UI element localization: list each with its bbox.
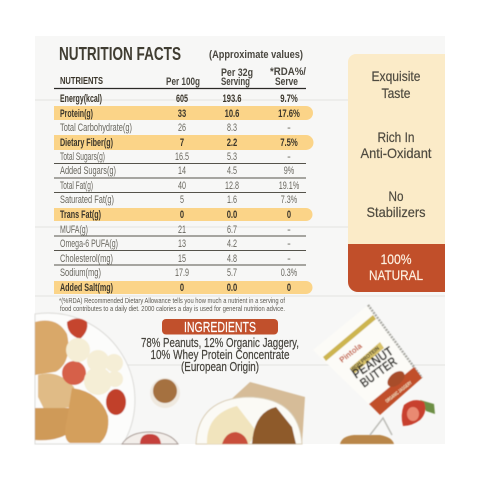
row: added salt: 0 — [287, 282, 291, 294]
row: saturated fat: 7.3% — [281, 194, 297, 206]
row: trans fat: 0.0 — [227, 209, 237, 221]
row: sugars — [60, 151, 291, 163]
column headers: *RDA%/ — [270, 66, 306, 78]
row: fiber: Dietary Fiber(g) — [60, 137, 113, 149]
row: cholesterol: Cholesterol(mg) — [60, 253, 113, 265]
row: saturated fat: 5 — [180, 194, 184, 206]
row: cholesterol: - — [287, 253, 291, 265]
product pouch: peanut butter: ORGANIC JAGGERY — [385, 380, 414, 405]
ingredients text: 10% Whey Protein Concentrate — [150, 348, 290, 362]
benefit: anti-oxidant: Anti-Oxidant — [360, 145, 432, 161]
product pouch: peanut butter: BUTTER — [357, 353, 400, 390]
row: added salt — [60, 282, 291, 294]
row: omega — [60, 238, 291, 250]
badge: 100% natural: NATURAL — [369, 267, 423, 283]
row: protein — [60, 108, 300, 120]
row: energy: 193.6 — [222, 93, 242, 105]
benefit: anti-oxidant — [360, 129, 432, 161]
row: energy: 605 — [176, 93, 188, 105]
row: saturated fat — [60, 194, 297, 206]
row: fiber: 7 — [180, 137, 184, 149]
column headers: Serve — [275, 76, 298, 88]
row: added salt: 0 — [180, 282, 184, 294]
benefit: exquisite taste — [372, 68, 421, 101]
benefit: anti-oxidant: Rich In — [378, 129, 414, 145]
benefit: no stabilizers — [366, 188, 426, 220]
row: saturated fat: 1.6 — [227, 194, 237, 206]
row: carbohydrate: - — [287, 122, 291, 134]
row: carbohydrate: Total Carbohydrate(g) — [60, 122, 132, 134]
row: omega: 13 — [178, 238, 186, 250]
product pouch: peanut butter: PEANUT — [349, 343, 396, 381]
row: fiber — [60, 137, 298, 149]
row: total fat — [60, 180, 299, 192]
row: trans fat — [60, 209, 291, 221]
napkin — [225, 382, 305, 444]
row: carbohydrate — [60, 122, 291, 134]
row: total fat: Total Fat(g) — [60, 180, 93, 192]
product pouch: peanut butter: HIGH PROTEIN — [349, 346, 381, 374]
row: energy — [60, 93, 298, 105]
row: mufa: 21 — [178, 224, 186, 236]
row: energy: 9.7% — [280, 93, 298, 105]
row: sodium — [60, 267, 297, 279]
benefit: exquisite taste: Taste — [382, 85, 411, 101]
nutrition table — [54, 44, 314, 313]
row: sodium: 17.9 — [175, 267, 189, 279]
ingredients text: 78% Peanuts, 12% Organic Jaggery, — [141, 336, 299, 350]
row: sodium: Sodium(mg) — [60, 267, 101, 279]
row: added salt: 0.0 — [227, 282, 237, 294]
strawberry — [402, 400, 435, 426]
row: omega: Omega-6 PUFA(g) — [60, 238, 118, 250]
ingredients text: (European Origin) — [181, 360, 259, 374]
row: added salt: Added Salt(mg) — [60, 282, 113, 294]
row: sugars: Total Sugars(g) — [60, 151, 105, 163]
row: sodium: 5.7 — [227, 267, 237, 279]
bottom berry bowl — [122, 432, 178, 444]
pancakes — [35, 320, 108, 443]
row: omega: 4.2 — [227, 238, 237, 250]
row: protein: Protein(g) — [60, 108, 93, 120]
product pouch: peanut butter: Pintola — [338, 341, 364, 365]
row: sugars: 5.3 — [227, 151, 237, 163]
footnote — [59, 296, 286, 313]
column headers: Per 100g — [166, 76, 200, 88]
row: mufa — [60, 224, 291, 236]
column headers: NUTRIENTS — [60, 76, 103, 87]
row: energy: Energy(kcal) — [60, 93, 102, 105]
row: added sugars: 14 — [178, 165, 186, 177]
row: added sugars: Added Sugars(g) — [60, 165, 116, 177]
ingredients text — [141, 336, 299, 374]
row: mufa: MUFA(g) — [60, 224, 88, 236]
row: added sugars — [60, 165, 294, 177]
row: protein: 10.6 — [225, 108, 239, 120]
highlight bands — [54, 106, 314, 294]
background: white wood panel — [35, 36, 445, 444]
row: cholesterol: 4.8 — [227, 253, 237, 265]
glass jar — [340, 418, 394, 444]
row: sugars: - — [287, 151, 291, 163]
panel: benefits — [348, 54, 445, 292]
badge: 100% natural: 100% — [380, 251, 412, 267]
title: NUTRITION FACTS — [59, 44, 181, 64]
row: mufa: - — [287, 224, 291, 236]
row: added sugars: 9% — [284, 165, 294, 177]
row: saturated fat: Saturated Fat(g) — [60, 194, 114, 206]
banana slices — [66, 338, 123, 395]
column headers: Serving — [221, 76, 250, 88]
benefit: exquisite taste: Exquisite — [372, 68, 421, 84]
row: protein: 17.6% — [278, 108, 300, 120]
row: total fat: 19.1% — [279, 180, 299, 192]
strawberries — [62, 318, 126, 415]
row: cholesterol — [60, 253, 291, 265]
benefit: no stabilizers: Stabilizers — [366, 204, 426, 220]
row: fiber: 2.2 — [227, 137, 237, 149]
food photos — [35, 305, 435, 444]
row: sodium: 0.3% — [281, 267, 297, 279]
column headers: Per 32g — [221, 67, 253, 79]
footnote: *(%RDA) Recommended Dietary Allowance tells you how much a nutrient in a serving of — [59, 296, 286, 305]
plate of pancakes — [35, 313, 135, 444]
row: protein: 33 — [178, 108, 186, 120]
product pouch: peanut butter — [313, 305, 422, 415]
row: mufa: 6.7 — [227, 224, 237, 236]
row: fiber: 7.5% — [280, 137, 298, 149]
row: total fat: 12.8 — [225, 180, 239, 192]
column headers — [60, 66, 306, 88]
row: trans fat: Trans Fat(g) — [60, 209, 101, 221]
row: cholesterol: 15 — [178, 253, 186, 265]
row: sugars: 16.5 — [175, 151, 189, 163]
row: omega: - — [287, 238, 291, 250]
row: carbohydrate: 8.3 — [227, 122, 237, 134]
row: total fat: 40 — [178, 180, 186, 192]
badge: 100% natural — [348, 244, 445, 292]
benefit: no stabilizers: No — [388, 188, 404, 204]
almond bowl — [150, 378, 180, 408]
subtitle: (Approximate values) — [209, 49, 303, 61]
row: carbohydrate: 26 — [178, 122, 186, 134]
row: trans fat: 0 — [180, 209, 184, 221]
ingredients heading: INGREDIENTS — [184, 319, 256, 336]
row: added sugars: 4.5 — [227, 165, 237, 177]
granola bowl — [196, 397, 302, 444]
footnote: food contributes to a daily diet. 2000 calories a day is used for general nutrition advice. — [60, 304, 285, 313]
row: trans fat: 0 — [287, 209, 291, 221]
